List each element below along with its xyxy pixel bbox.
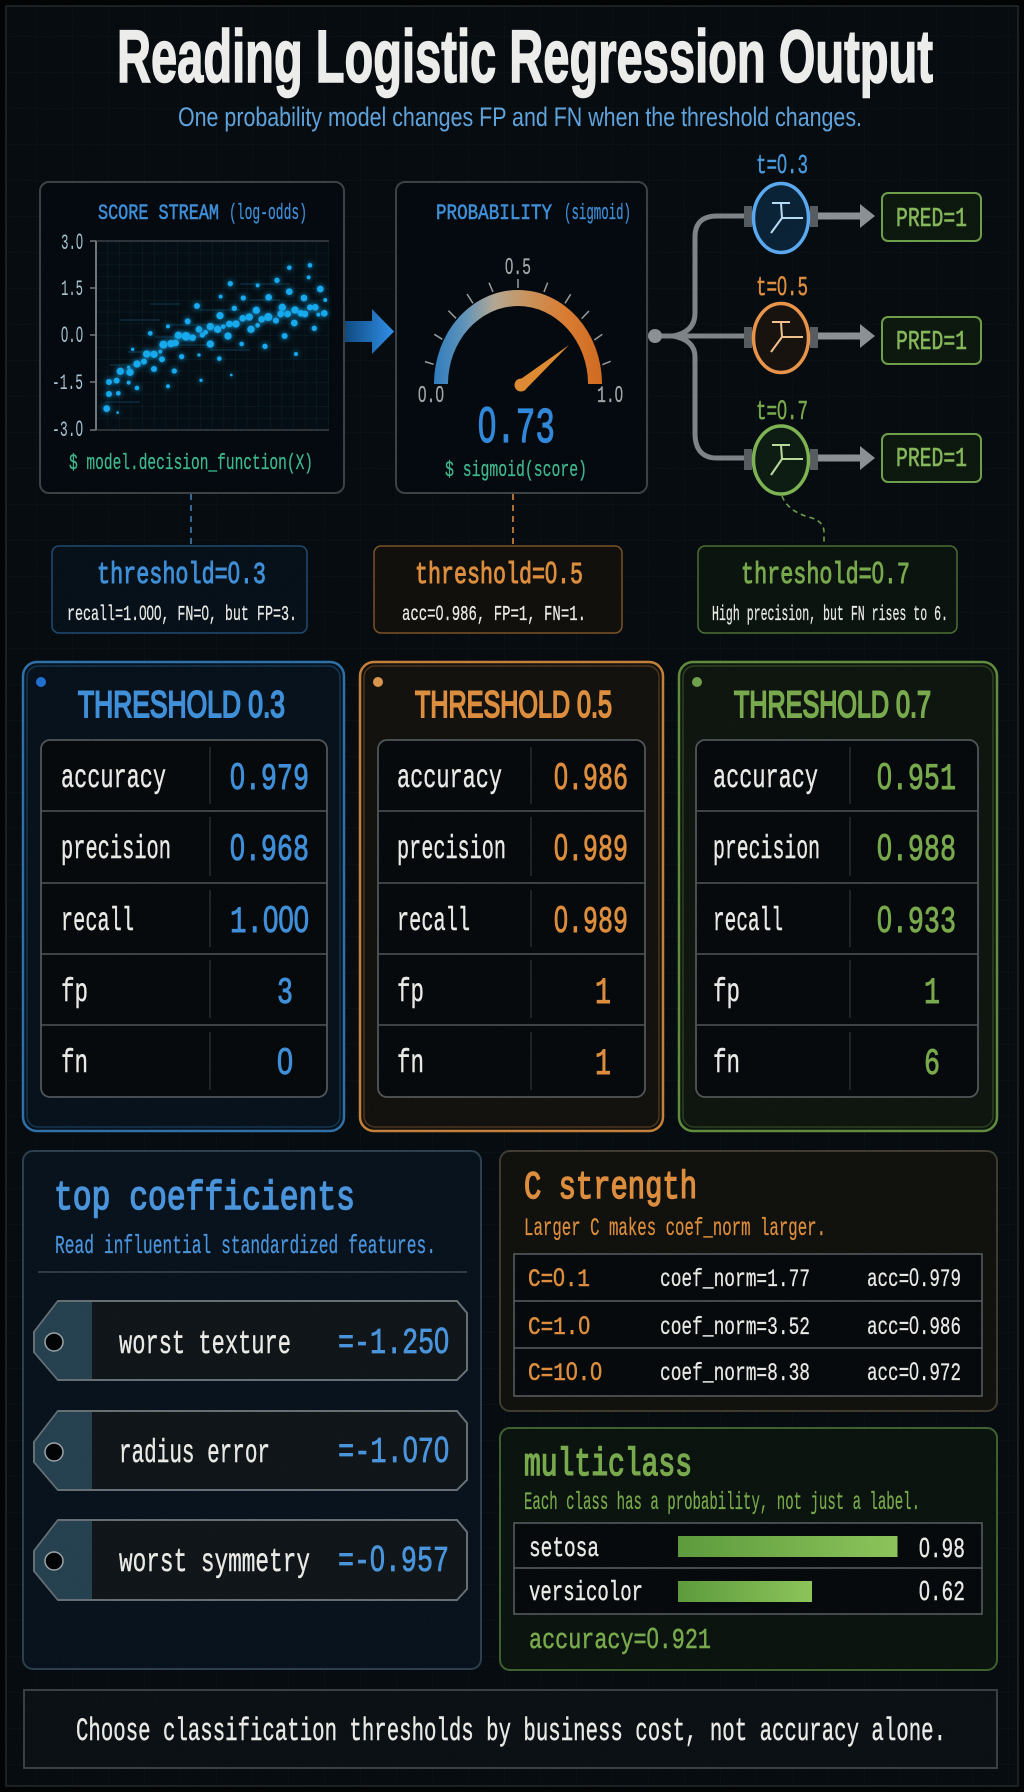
coefficients subheading: Read influential standardized features. [55,1231,436,1261]
coefficients heading: top coefficients [54,1176,355,1222]
C table: coef_norm=8.38 [660,1359,810,1388]
prediction box 2: PRED=1 [896,328,967,358]
callout: threshold 0.5: threshold=0.5 [415,555,583,593]
switch t=0.5 [744,271,818,372]
metrics table: accuracy [713,760,818,797]
metrics table: 0.933 [877,899,956,944]
metrics table: 0.986 [554,756,628,801]
metrics table: 0.988 [877,827,956,872]
status pin [36,677,46,687]
multiclass accuracy: accuracy=0.921 [529,1623,711,1657]
metrics table: 0.989 [554,827,628,872]
C table [514,1254,982,1396]
callout: threshold 0.5: acc=0.986, FP=1, FN=1. [402,602,586,627]
metrics table: fn [713,1045,740,1082]
connector: green [782,496,824,546]
C table: acc=0.979 [867,1264,961,1294]
C strength subheading: Larger C makes coef_norm larger. [524,1214,826,1243]
metrics table: fp [713,974,740,1011]
score command: $ model.decision_function(X) [69,451,313,476]
metrics table: recall [713,903,783,940]
metrics table: fn [397,1045,424,1082]
y axis labels: -3.0 [52,416,83,443]
metrics table: precision [713,831,820,868]
callout: threshold 0.3: recall=1.000, FN=0, but FP=3. [67,602,297,627]
metrics table: 0.989 [554,899,628,944]
metrics table: precision [397,831,506,868]
metrics table: 1.000 [230,899,309,944]
tag: radius error: radius error [119,1435,270,1472]
pipes [655,216,744,458]
tag: radius error: =-1.070 [338,1429,449,1473]
panel: threshold 0.5 card [360,662,663,1131]
class probability table: setosa [529,1534,599,1565]
status pin [692,677,702,687]
panel: threshold 0.7 card [679,662,997,1131]
gauge [418,253,623,409]
gauge: 0.5 [505,253,531,281]
callout: threshold 0.5 [374,546,622,633]
class probability table: 0.98 [919,1532,965,1566]
connector: blue [190,494,192,546]
panel: C strength [500,1151,997,1411]
C table: coef_norm=1.77 [660,1265,810,1294]
metrics table: 0.951 [877,756,956,801]
y axis labels [52,229,83,443]
metrics table: precision [61,831,171,868]
score stream heading: SCORE STREAM [98,201,219,226]
callout: threshold 0.3: threshold=0.3 [97,555,266,593]
metrics table: accuracy [61,760,166,797]
bar: versicolor [678,1581,812,1602]
multiclass heading: multiclass [524,1443,692,1487]
C table: C=10.0 [528,1358,602,1388]
source node [648,329,662,343]
probability heading: PROBABILITY [436,201,552,226]
switch t=0.7: t=0.7 [756,395,808,428]
metrics table: 0.968 [230,827,309,872]
panel: top coefficients [23,1151,481,1669]
sigmoid command: $ sigmoid(score) [445,458,587,483]
tag: worst symmetry: =-0.957 [338,1538,449,1582]
probability heading: (sigmoid) [564,201,631,226]
C table: acc=0.972 [867,1358,961,1388]
connector: orange [512,494,514,546]
C table: acc=0.986 [867,1312,961,1342]
tag: radius error [34,1411,467,1490]
metrics table: 1 [595,973,611,1015]
class probability table: versicolor [529,1578,643,1609]
metrics table [378,740,645,1097]
prediction box 3 [882,434,981,482]
metrics table: 1 [595,1044,611,1086]
C table: coef_norm=3.52 [660,1313,810,1342]
metrics table: accuracy [397,760,502,797]
metrics table: recall [61,903,134,940]
prediction box 3: PRED=1 [896,445,967,475]
metrics table: 3 [277,973,293,1015]
callout: threshold 0.7 [698,546,957,633]
switch t=0.7 [744,395,818,494]
output arrows [818,204,875,470]
switch t=0.3: t=0.3 [756,149,808,182]
switch t=0.3 [744,149,818,252]
metrics table: fn [61,1045,88,1082]
subtitle: One probability model changes FP and FN when the threshold changes. [178,102,862,132]
metrics table: fp [397,974,424,1011]
metrics table: 0.979 [230,756,309,801]
switch t=0.5: t=0.5 [756,271,808,304]
C table: C=0.1 [528,1264,590,1294]
card heading: THRESHOLD 0.3 [78,684,285,725]
gauge: 0.0 [418,381,444,409]
metrics table [696,740,978,1097]
tag: worst texture: worst texture [119,1326,291,1363]
card heading: THRESHOLD 0.7 [734,684,931,725]
C strength heading: C strength [524,1166,697,1210]
bar: setosa [678,1536,898,1557]
scatter chart [90,241,329,430]
tag: worst texture: =-1.250 [338,1320,449,1364]
prediction box 2 [882,317,981,364]
panel: probability gauge [396,182,647,493]
card heading: THRESHOLD 0.5 [415,684,612,725]
panel: score stream [40,182,344,493]
y axis labels: 3.0 [61,229,83,256]
footer takeaway [24,1690,997,1768]
status pin [373,677,383,687]
metrics table: 6 [924,1044,940,1086]
callout: threshold 0.3 [52,546,307,633]
tag: worst symmetry [34,1520,467,1600]
needle [514,345,569,392]
class probability table: 0.62 [919,1575,965,1609]
metrics table: 0 [277,1041,293,1082]
metrics table: fp [61,974,88,1011]
threshold router [648,149,981,494]
score stream heading: (log-odds) [229,201,307,226]
tag: worst texture [34,1301,467,1380]
probability value: 0.73 [478,397,555,458]
C table: C=1.0 [528,1312,590,1342]
prediction box 1 [882,193,981,241]
tag: worst symmetry: worst symmetry [119,1544,310,1581]
y axis labels: 1.5 [61,277,83,302]
prediction box 1: PRED=1 [896,205,967,235]
panel: threshold 0.3 card [23,662,344,1131]
metrics table: recall [397,903,470,940]
class probability table [514,1523,982,1614]
y axis labels: -1.5 [52,371,83,396]
gauge: 1.0 [597,381,623,409]
arrow: score to probability [345,309,394,354]
metrics table: 1 [924,973,940,1015]
y axis labels: 0.0 [61,322,83,349]
callout: threshold 0.7: threshold=0.7 [741,555,910,593]
metrics table [41,740,327,1097]
panel: multiclass [500,1428,997,1670]
